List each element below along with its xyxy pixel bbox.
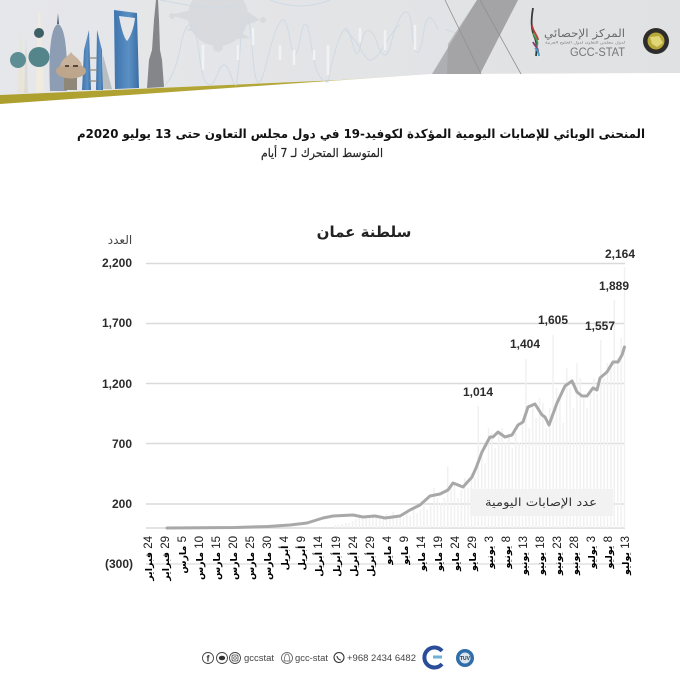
- x axis date labels: 3 يونيو: [484, 536, 496, 570]
- logo ribbon: [532, 8, 537, 56]
- x axis date labels: 24 مايو: [450, 535, 462, 572]
- x axis date labels: 29 مايو: [467, 536, 479, 572]
- x axis date labels: 10 مارس: [194, 536, 206, 580]
- virus watermark: [169, 0, 266, 52]
- icon: snapchat: [282, 652, 292, 664]
- gold ribbon: [0, 74, 432, 104]
- data labels: [463, 247, 635, 399]
- x axis date labels: 30 مارس: [262, 536, 274, 580]
- x axis date labels: 25 مارس: [245, 536, 257, 580]
- x axis date labels: 20 مارس: [228, 536, 240, 580]
- data labels: 2,164: [605, 247, 635, 261]
- title: المنحنى الوبائي للإصابات اليومية المؤكدة لكوفيد-19 في دول مجلس التعاون حتى 13 يوليو 2020م: [77, 126, 645, 142]
- y axis labels: 700: [112, 437, 132, 451]
- x axis date labels: 13 يوليو: [620, 536, 632, 576]
- bahrain world trade center: [82, 30, 112, 90]
- faint chart lines: [160, 0, 462, 85]
- domed tower: [56, 52, 86, 90]
- icon: facebook: f: [206, 654, 210, 664]
- y axis labels: 2,200: [102, 256, 132, 270]
- logo: GCC-STAT: [532, 8, 669, 59]
- snapchat handle: gcc-stat: [295, 653, 328, 664]
- logo subtitle: لدول مجلس التعاون لدول الخليج العربية: [545, 40, 625, 44]
- x axis date labels: 15 مارس: [211, 536, 223, 580]
- y axis labels: 200: [112, 497, 132, 511]
- gridlines: [146, 264, 625, 564]
- footer contact bar: [202, 648, 474, 667]
- legend box: عدد الإصابات اليومية: [485, 495, 597, 510]
- daily case bars: [335, 267, 624, 528]
- x axis date labels: 28 يونيو: [569, 536, 581, 576]
- icon: tuv badge: [456, 649, 474, 667]
- x axis date labels: 24 أبريل: [347, 535, 360, 577]
- x axis date labels: 18 يونيو: [535, 536, 547, 576]
- x axis date labels: 24 فبراير: [143, 535, 155, 582]
- emblem: [643, 28, 669, 54]
- twisted tower: [49, 13, 67, 91]
- x axis date labels: 4 أبريل: [278, 535, 291, 570]
- x axis date labels: 9 أبريل: [295, 536, 308, 570]
- social handle: gccstat: [244, 653, 274, 664]
- x axis date labels: 14 أبريل: [312, 535, 325, 577]
- icon: tuv badge: TUV: [460, 656, 471, 662]
- x axis date labels: 29 فبراير: [160, 536, 172, 582]
- kingdom tower: [114, 10, 139, 89]
- icon: quality logo: [424, 648, 442, 667]
- y axis labels: (300): [105, 557, 133, 571]
- skyline illustration: [10, 0, 164, 93]
- y axis labels: 1,700: [102, 316, 132, 330]
- y axis labels: 1,200: [102, 377, 132, 391]
- header banner: [0, 0, 680, 104]
- x axis date labels: 23 يونيو: [552, 536, 564, 576]
- x axis date labels: 14 مايو: [416, 535, 428, 572]
- chart title: سلطنة عمان: [317, 223, 411, 241]
- data labels: 1,557: [585, 319, 615, 333]
- y axis labels: [102, 256, 133, 571]
- data labels: 1,014: [463, 385, 493, 399]
- seven day moving average line: [167, 347, 624, 528]
- diagonal bands: [432, 0, 518, 74]
- x axis date labels: 19 أبريل: [330, 536, 343, 577]
- icon: instagram: [230, 652, 240, 664]
- x axis date labels: 3 يوليو: [586, 536, 598, 570]
- legend box: [470, 489, 613, 516]
- x axis date labels: 9 مايو: [399, 536, 411, 566]
- x axis date labels: [143, 535, 632, 582]
- logo arabic name: المركز الإحصائي: [544, 27, 625, 40]
- data labels: 1,889: [599, 279, 629, 293]
- x axis date labels: 5 مارس: [177, 536, 189, 574]
- x axis date labels: 8 يونيو: [501, 536, 513, 570]
- burj khalifa: [147, 0, 164, 88]
- x axis date labels: 13 يونيو: [518, 536, 530, 576]
- x axis date labels: 8 يوليو: [603, 536, 615, 570]
- x axis date labels: 29 أبريل: [364, 536, 377, 577]
- line and bar chart: [102, 247, 635, 582]
- x axis date labels: 19 مايو: [433, 536, 445, 572]
- icon: twitter: [216, 652, 228, 664]
- data labels: 1,605: [538, 313, 568, 327]
- phone number: +968 2434 6482: [347, 653, 416, 664]
- logo english name: GCC-STAT: [570, 47, 625, 59]
- subtitle: المتوسط المتحرك لـ 7 أيام: [261, 145, 383, 161]
- x axis date labels: 4 مايو: [382, 535, 394, 566]
- Kuwait towers: [10, 12, 50, 93]
- icon: facebook: [202, 652, 214, 664]
- y axis title: العدد: [108, 233, 132, 247]
- icon: whatsapp: [334, 652, 344, 662]
- data labels: 1,404: [510, 337, 540, 351]
